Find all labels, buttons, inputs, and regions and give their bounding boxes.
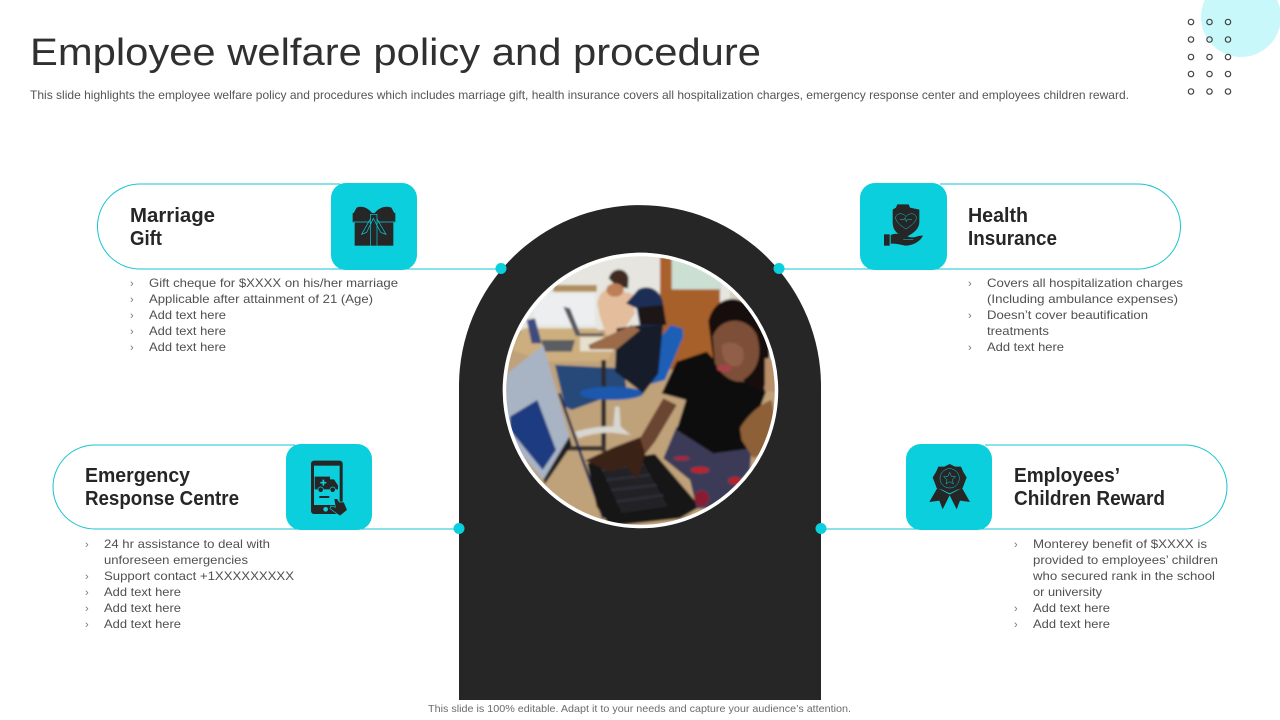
heading — [85, 465, 239, 510]
heading: Children Reward — [1014, 488, 1165, 510]
connector dot — [816, 523, 826, 534]
bullet list: Doesn’t cover beautification — [987, 308, 1148, 322]
icon tile — [286, 444, 372, 530]
bullet list: (Including ambulance expenses) — [987, 292, 1178, 306]
central photo: woman working on a laptop in an office — [500, 250, 780, 530]
bullet list: Add text here — [149, 308, 226, 322]
heading: Employees’ — [1014, 465, 1120, 487]
bullet list: Add text here — [104, 617, 181, 631]
heading: Health — [968, 205, 1028, 227]
bullet list: Add text here — [149, 340, 226, 354]
heading — [968, 205, 1057, 250]
bullet list: Applicable after attainment of 21 (Age) — [149, 292, 373, 306]
bullet list: Add text here — [104, 585, 181, 599]
heading: Gift — [130, 228, 162, 250]
panel: marriage gift — [98, 183, 506, 354]
heading: Emergency — [85, 465, 191, 487]
icon tile — [331, 183, 417, 270]
bullet list — [85, 537, 294, 631]
icon: gift box — [353, 207, 395, 246]
heading: Response Centre — [85, 488, 239, 510]
decoration: corner circle and dot grid — [1188, 0, 1280, 94]
connector dot — [774, 263, 784, 274]
bullet list: provided to employees’ children — [1033, 553, 1218, 567]
bullet list: Add text here — [1033, 617, 1110, 631]
icon: award rosette — [929, 464, 970, 509]
bullet list: › — [968, 278, 972, 290]
bullet list: › — [85, 571, 89, 583]
bullet list: › — [968, 342, 972, 354]
bullet list: Covers all hospitalization charges — [987, 276, 1183, 290]
bullet list: Monterey benefit of $XXXX is — [1033, 537, 1207, 551]
bullet list: › — [968, 310, 972, 322]
icon: shield and hand — [884, 204, 923, 246]
heading: Insurance — [968, 228, 1057, 250]
bullet list: › — [85, 603, 89, 615]
bullet list: › — [85, 619, 89, 631]
pill outline with connector — [779, 184, 1180, 269]
bullet list: treatments — [987, 324, 1049, 338]
bullet list — [130, 276, 398, 354]
bullet list — [1014, 537, 1218, 631]
bullet list: Add text here — [1033, 601, 1110, 615]
bullet list: › — [130, 326, 134, 338]
heading: Marriage — [130, 205, 215, 227]
pill outline with connector — [98, 184, 501, 269]
connector dot — [454, 523, 464, 534]
bullet list: › — [130, 278, 134, 290]
bullet list: 24 hr assistance to deal with — [104, 537, 270, 551]
bullet list: Add text here — [987, 340, 1064, 354]
subtitle: This slide highlights the employee welfare policy and procedures which includes marriage gift, health insurance covers all hospitalization charges, emergency response center and employees children reward. — [30, 88, 1129, 102]
central dark arch — [459, 205, 821, 700]
heading — [130, 205, 215, 250]
bullet list: Support contact +1XXXXXXXXX — [104, 569, 294, 583]
heading — [1014, 465, 1165, 510]
footer note: This slide is 100% editable. Adapt it to your needs and capture your audience’s attention. — [428, 703, 851, 715]
title: Employee welfare policy and procedure — [30, 32, 761, 74]
bullet list: who secured rank in the school — [1032, 569, 1215, 583]
bullet list — [968, 276, 1183, 354]
pill outline with connector — [821, 445, 1227, 529]
panel: health insurance — [774, 183, 1183, 354]
icon tile — [906, 444, 992, 530]
bullet list: Add text here — [104, 601, 181, 615]
bullet list: Add text here — [149, 324, 226, 338]
bullet list: › — [1014, 603, 1018, 615]
bullet list: or university — [1033, 585, 1102, 599]
icon: phone with ambulance — [311, 461, 347, 516]
bullet list: › — [1014, 539, 1018, 551]
pill outline with connector — [53, 445, 459, 529]
panel: emergency response centre — [53, 444, 464, 631]
connector dot — [496, 263, 506, 274]
bullet list: unforeseen emergencies — [104, 553, 248, 567]
photo white ring — [504, 254, 776, 526]
icon tile — [860, 183, 947, 270]
bullet list: › — [85, 539, 89, 551]
bullet list: › — [130, 294, 134, 306]
bullet list: › — [130, 342, 134, 354]
bullet list: › — [85, 587, 89, 599]
panel: employees' children reward — [816, 444, 1227, 631]
bullet list: › — [130, 310, 134, 322]
bullet list: › — [1014, 619, 1018, 631]
bullet list: Gift cheque for $XXXX on his/her marriage — [149, 276, 398, 290]
